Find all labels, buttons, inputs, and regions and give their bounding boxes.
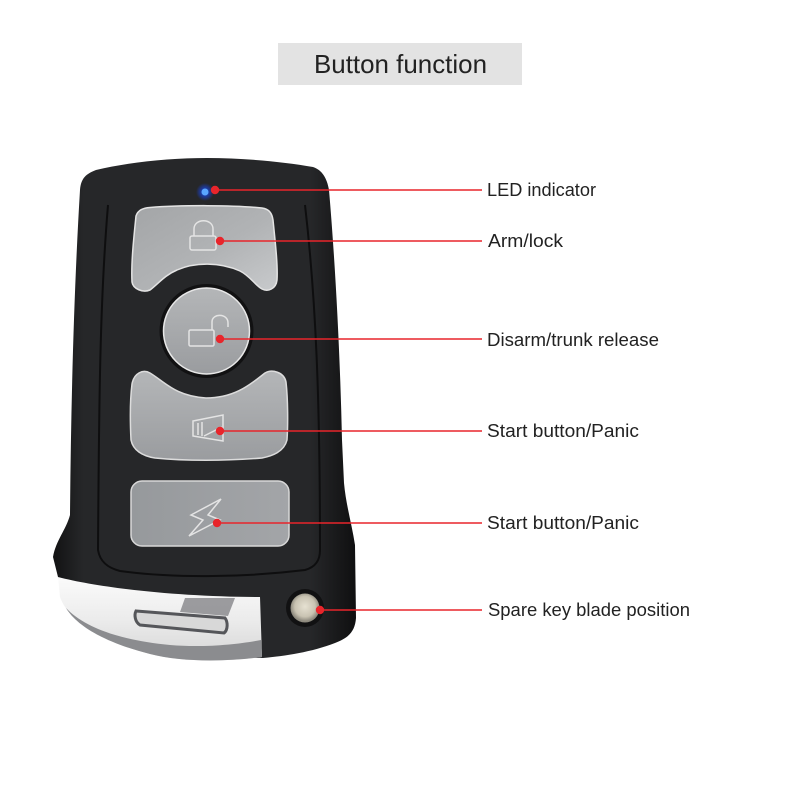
metal stud [286,589,324,627]
callout: Spare key blade position: Spare key blade position [488,600,690,620]
button: trunk [130,371,288,460]
callout: LED indicator [211,180,596,200]
callout: Start button/Panic lower: Start button/Panic [487,513,639,533]
callout: LED indicator: LED indicator [487,180,596,200]
icon: locked padlock [190,221,216,250]
callout: Disarm/trunk release: Disarm/trunk release [487,330,659,350]
button: disarm [160,284,254,378]
icon: lightning bolt [189,499,221,536]
icon: open trunk [193,415,223,441]
callout: Arm/lock [216,231,564,251]
callout: Arm/lock: Arm/lock [488,231,564,251]
title: Button function [314,49,487,79]
fob body [53,158,356,658]
callout: Start button/Panic upper: Start button/Panic [487,421,639,441]
callout: Spare key blade position [316,600,690,620]
icon: open padlock [189,315,228,346]
callout: Disarm/trunk release [216,330,659,350]
button: arm/lock [132,206,277,291]
chrome dark reflection band [66,608,262,660]
button: start [131,481,289,546]
inner panel outline [98,205,320,576]
chrome dark reflection near slot [180,598,235,616]
blade slot [135,611,227,633]
key fob [53,158,356,660]
callout: Start button/Panic lower [213,513,639,533]
title [278,43,522,85]
LED [196,183,214,201]
chrome blade cover [58,577,262,660]
callout: Start button/Panic upper [216,421,639,441]
